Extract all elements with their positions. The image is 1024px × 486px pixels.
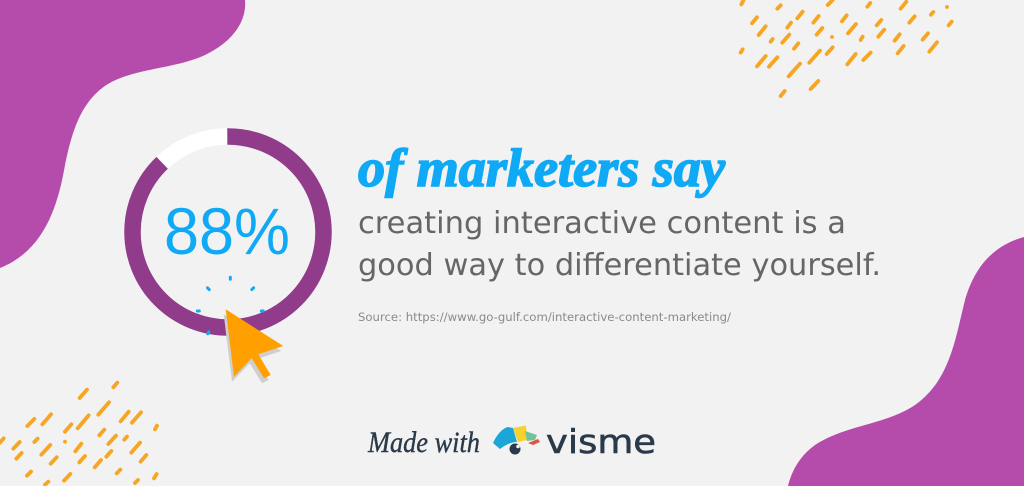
body text: good way to differentiate yourself.: [358, 248, 881, 283]
icon: cursor arrow: [224, 309, 283, 383]
click sparks: [197, 277, 263, 343]
icon: visme logo: [493, 426, 540, 454]
progress ring: 88%: [132, 136, 324, 328]
made with label: Made with: [367, 426, 480, 459]
orange dashes: bottom left: [0, 383, 157, 485]
heading: of marketers say: [358, 138, 726, 198]
source line: Source: https://www.go-gulf.com/interactive-content-marketing/: [358, 310, 731, 324]
body text: [358, 206, 881, 283]
purple blob: top left: [0, 0, 245, 268]
percentage value: 88%: [164, 194, 290, 268]
orange dashes: top right: [741, 0, 952, 96]
purple blob: bottom right: [788, 237, 1024, 486]
visme wordmark: visme: [546, 422, 656, 461]
body text: creating interactive content is a: [358, 206, 846, 241]
